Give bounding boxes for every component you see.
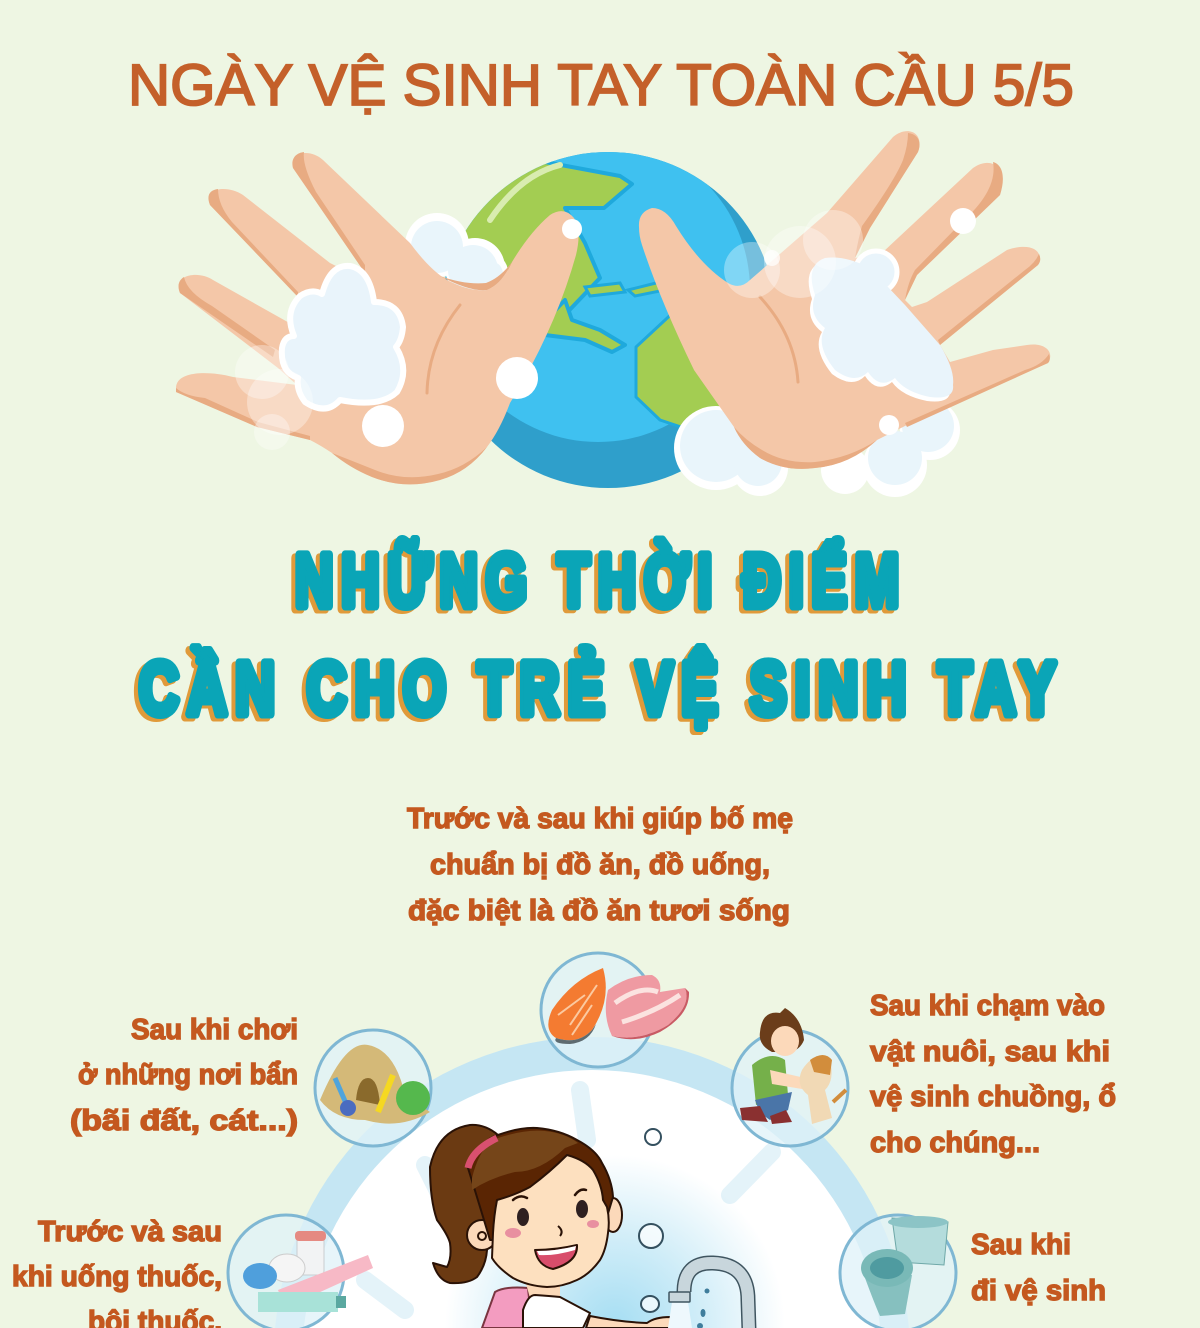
soap bubbles: [639, 1129, 663, 1312]
text: playing in dirt: [70, 1014, 298, 1137]
text: pets: Sau khi chạm vào: [870, 990, 1105, 1022]
headband: [468, 1138, 497, 1168]
illustration: earth with soapy hands: [176, 131, 1050, 500]
lighter hair: [472, 1131, 578, 1190]
icon bubble: boy hugging dog: [732, 1008, 848, 1146]
text: food preparation: đặc biệt là đồ ăn tươi sống: [408, 895, 790, 927]
text: playing in dirt: Sau khi chơi: [131, 1014, 298, 1046]
water drops: [697, 1288, 710, 1328]
ponytail: [430, 1125, 498, 1283]
cheeks: [505, 1220, 599, 1238]
shirt: [523, 1295, 590, 1328]
foam on left palm: [282, 266, 403, 409]
text: toilet: Sau khi: [971, 1229, 1071, 1261]
heading text: NHỮNG THỜI ĐIỂM: [295, 539, 907, 622]
text: medicine: Trước và sau: [38, 1216, 222, 1248]
foam on right palm: [809, 251, 953, 402]
mouth: [535, 1245, 577, 1269]
text: pets: [870, 990, 1116, 1159]
heading shadow: NHỮNG THỜI ĐIỂM: [291, 542, 903, 625]
text: food preparation: chuẩn bị đồ ăn, đồ uống,: [430, 849, 770, 881]
heading text: [139, 539, 1064, 730]
faucet: [684, 1263, 749, 1328]
nose: [558, 1226, 562, 1236]
text: pets: vật nuôi, sau khi: [870, 1036, 1110, 1068]
teeth: [537, 1246, 576, 1255]
right hand: [639, 131, 1050, 469]
icon bubble: medicine: [228, 1215, 373, 1328]
text: toilet: [971, 1229, 1106, 1307]
ear left: [467, 1220, 497, 1250]
text: playing in dirt: (bãi đất, cát...): [70, 1105, 298, 1137]
text: food preparation: Trước và sau khi giúp bố mẹ: [407, 803, 793, 835]
text: medicine: [12, 1216, 222, 1328]
text: playing in dirt: ở những nơi bẩn: [78, 1059, 298, 1091]
arm: [586, 1316, 678, 1328]
left hand: [176, 152, 579, 484]
foam behind left hand: [398, 213, 508, 298]
translucent soap: [235, 210, 863, 450]
soap bubbles: [362, 208, 976, 447]
text: food preparation: [407, 803, 793, 927]
brows: [513, 1190, 586, 1200]
arc ring with white interior: [274, 1037, 910, 1328]
text: pets: cho chúng...: [870, 1127, 1040, 1159]
icon bubble: sand castle: [315, 1030, 431, 1146]
text: toilet: đi vệ sinh: [971, 1275, 1106, 1307]
icon bubble: toilet: [840, 1215, 956, 1328]
head hair: [468, 1128, 613, 1240]
heading shadow: [135, 542, 1060, 733]
water: [668, 1302, 692, 1328]
title: NGÀY VỆ SINH TAY TOÀN CẦU 5/5: [128, 53, 1074, 118]
nozzle: [669, 1292, 690, 1302]
backpack: [482, 1288, 532, 1328]
ear right: [604, 1198, 622, 1232]
heading: [135, 539, 1064, 733]
foam behind right hand: [674, 400, 960, 497]
face: [492, 1155, 609, 1287]
neck: [525, 1280, 560, 1298]
eyes: [517, 1200, 588, 1226]
text: pets: vệ sinh chuồng, ổ: [870, 1081, 1116, 1113]
icon: globe: [445, 152, 767, 488]
text: medicine: khi uống thuốc,: [12, 1261, 222, 1293]
icon bubble: salmon and meat: [541, 953, 689, 1067]
illustration: girl washing hands: [430, 1125, 749, 1328]
